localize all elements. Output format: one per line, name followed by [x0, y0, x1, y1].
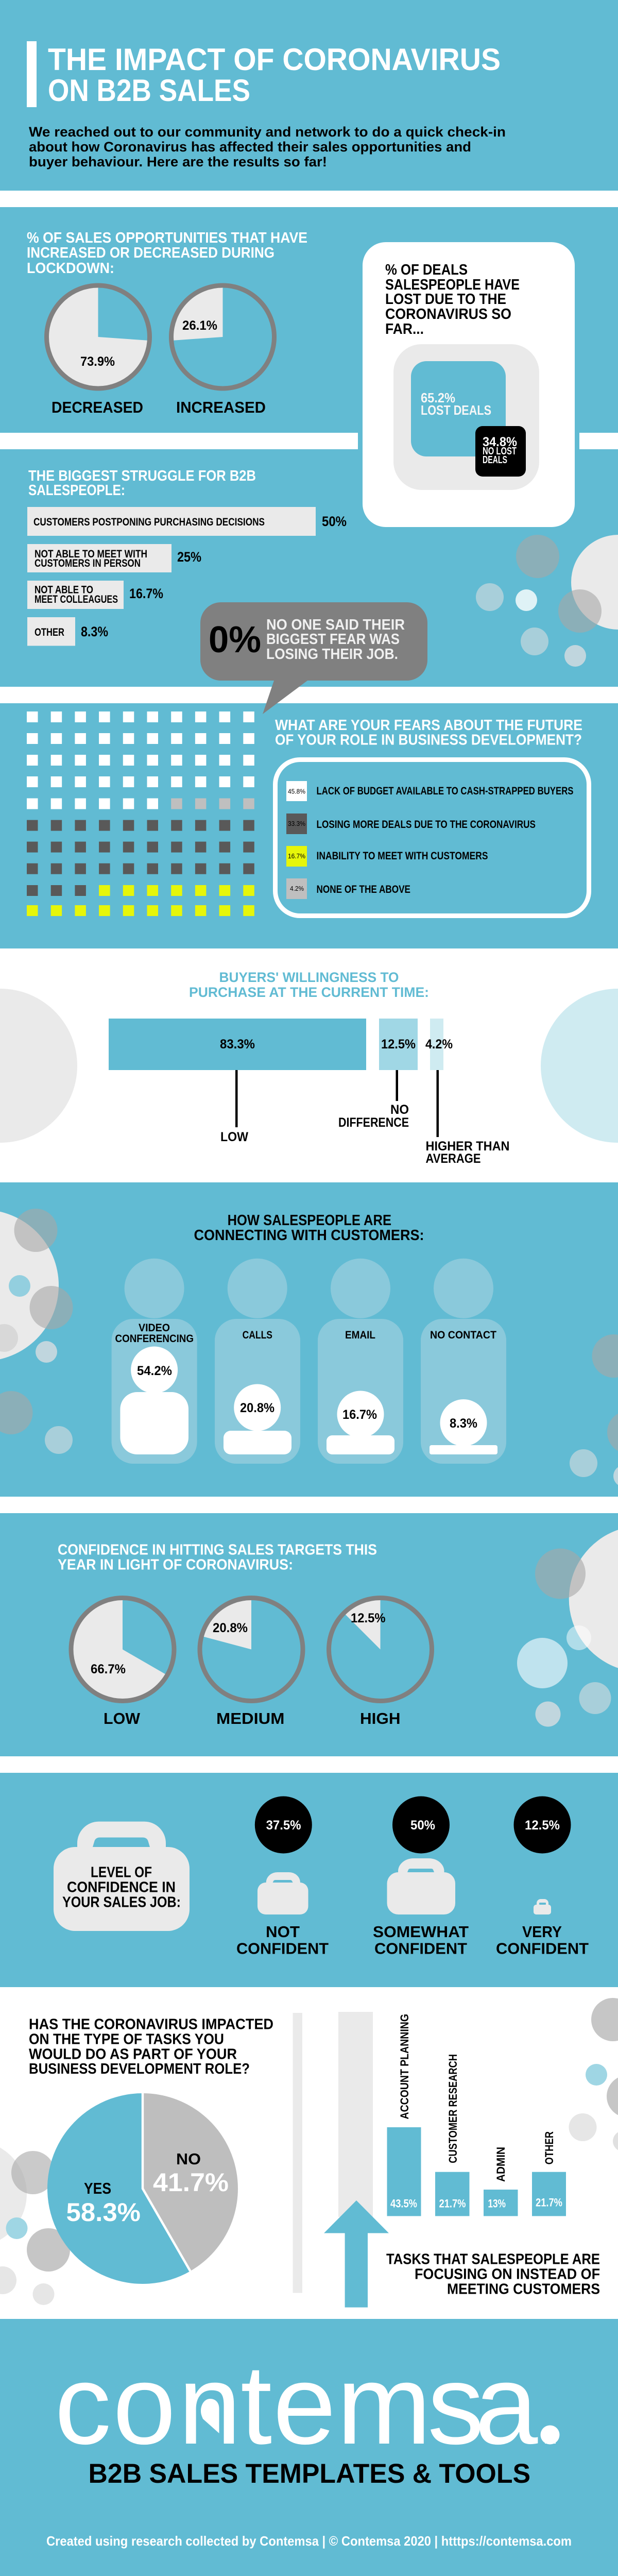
heading: tasks impact question: [29, 2016, 273, 2077]
heading: [28, 468, 256, 499]
decorative circles: struggle section: [476, 535, 618, 667]
bar: no difference: 12.5%: [381, 1037, 416, 1052]
legend item: losing deals: 33.3%: [288, 820, 305, 827]
heading: tasks impact question: WOULD DO AS PART OF YOUR: [29, 2046, 237, 2063]
heading: % OF DEALS: [385, 262, 468, 278]
decorative circles: connecting right: [570, 1334, 618, 1487]
heading: [189, 970, 429, 1000]
bar: postponing: CUSTOMERS POSTPONING PURCHASING DECISIONS: [33, 516, 265, 528]
bar: admin: ADMIN: [494, 2147, 507, 2182]
bar: customer research: 21.7%: [439, 2197, 466, 2210]
bar: low: [109, 1019, 366, 1144]
pie: high confidence: [329, 1598, 432, 1727]
panel: sales opportunities: [27, 230, 307, 416]
legend item: none: [286, 878, 410, 899]
person: video conferencing: VIDEO: [139, 1322, 170, 1334]
decorative circle left: [0, 989, 77, 1143]
intro text: buyer behaviour. Here are the results so far!: [29, 154, 327, 170]
bar: other: 21.7%: [536, 2196, 562, 2209]
bar: colleagues: MEET COLLEAGUES: [35, 594, 118, 605]
legend item: inability to meet: INABILITY TO MEET WITH CUSTOMERS: [316, 850, 488, 862]
bar: colleagues: 16.7%: [129, 586, 163, 601]
heading: confidence in targets: [58, 1541, 377, 1573]
heading: INCREASED OR DECREASED DURING: [27, 245, 274, 261]
stat: somewhat confident: CONFIDENT: [374, 1939, 467, 1958]
bar: low: LOW: [220, 1130, 248, 1144]
heading: % OF SALES OPPORTUNITIES THAT HAVE: [27, 230, 307, 246]
pie: yes or no: YES: [84, 2179, 111, 2197]
label: decreased: DECREASED: [52, 398, 143, 416]
person: video conferencing: 54.2%: [137, 1364, 172, 1378]
divider column: [293, 2013, 302, 2293]
bar: no difference: [338, 1019, 418, 1130]
pie: medium confidence: MEDIUM: [216, 1709, 284, 1727]
decorative circles: tasks right: [569, 1998, 618, 2151]
stat: somewhat confident: 50%: [410, 1818, 435, 1833]
panel: header: [0, 0, 618, 191]
icon: large briefcase with heading: LEVEL OF: [91, 1864, 152, 1880]
bar: customers in person: 25%: [177, 549, 201, 565]
bar: account planning: ACCOUNT PLANNING: [398, 2014, 411, 2120]
panel: buyers' willingness: [0, 970, 618, 1166]
stat: very confident: [496, 1796, 589, 1958]
legend item: inability to meet: 16.7%: [288, 852, 305, 860]
person: email: [318, 1259, 403, 1464]
decorative circles: targets: [517, 1530, 618, 1727]
pie: low confidence: 66.7%: [91, 1662, 126, 1676]
title accent bar: [27, 41, 37, 107]
heading: [27, 230, 307, 277]
pie: high confidence: 12.5%: [351, 1611, 385, 1625]
pie: yes or no: NO: [176, 2150, 201, 2168]
panel: opportunities and struggles background: [0, 207, 618, 687]
heading: fears: [275, 717, 582, 748]
pie: yes or no: 58.3%: [66, 2198, 141, 2227]
label: increased: INCREASED: [176, 398, 266, 416]
heading: LOCKDOWN:: [27, 260, 114, 277]
stat: very confident: VERY: [522, 1923, 562, 1941]
callout: no one feared losing job: NO ONE SAID THEIR: [266, 617, 405, 633]
caption: tasks focus: FOCUSING ON INSTEAD OF: [415, 2266, 600, 2283]
bar: other: OTHER: [35, 626, 64, 638]
heading: how salespeople connect: CONNECTING WITH CUSTOMERS:: [194, 1227, 424, 1244]
intro text: We reached out to our community and network to do a quick check-in: [29, 124, 506, 140]
pie: increased: 26.1%: [182, 318, 217, 333]
panel: fears background: [0, 703, 618, 948]
bar: postponing: [27, 507, 347, 536]
stat: very confident: 12.5%: [525, 1818, 560, 1833]
heading: SALESPEOPLE:: [28, 482, 125, 499]
chart: lost deals nested squares: 34.8%: [483, 435, 517, 449]
caption: tasks focus: [386, 2251, 600, 2297]
title: [48, 42, 501, 108]
heading: fears: OF YOUR ROLE IN BUSINESS DEVELOPMENT?: [275, 732, 582, 748]
person: calls: CALLS: [243, 1329, 272, 1341]
heading: CORONAVIRUS SO: [385, 306, 511, 323]
divider strip left: [0, 433, 358, 449]
icon: large briefcase with heading: [54, 1822, 190, 1931]
bar: account planning: [387, 2014, 421, 2216]
credit line: Created using research collected by Contemsa | © Contemsa 2020 | htttps://contemsa.com: [46, 2533, 572, 2549]
callout: no one feared losing job: BIGGEST FEAR WAS: [266, 631, 400, 648]
intro text: [29, 124, 506, 170]
person: calls: 20.8%: [240, 1401, 274, 1415]
panel: connecting with customers background: [0, 1182, 618, 1497]
bar: customers in person: [27, 544, 201, 572]
callout: no one feared losing job: 0%: [209, 619, 261, 660]
decorative circles: tasks left: [0, 2141, 70, 2305]
stat: somewhat confident: SOMEWHAT: [373, 1923, 469, 1941]
caption: tasks focus: MEETING CUSTOMERS: [447, 2281, 600, 2297]
person: no contact: NO CONTACT: [430, 1329, 496, 1341]
pie: decreased: 73.9%: [80, 354, 115, 369]
panel: footer: [0, 2319, 618, 2576]
bar: other: OTHER: [543, 2131, 556, 2164]
heading: SALESPEOPLE HAVE: [385, 277, 520, 293]
heading: tasks impact question: HAS THE CORONAVIRUS IMPACTED: [29, 2016, 273, 2033]
pie: medium confidence: [200, 1598, 303, 1727]
bar: no difference: DIFFERENCE: [338, 1115, 409, 1130]
chart: fears waffle grid: [27, 711, 254, 916]
intro text: about how Coronavirus has affected their sales opportunities and: [29, 139, 471, 155]
icon: logo dot: [541, 2426, 559, 2444]
pie: decreased: [46, 285, 149, 388]
bar: account planning: 43.5%: [390, 2197, 417, 2210]
chart: lost deals nested squares: 65.2%: [421, 390, 455, 405]
chart: lost deals nested squares: [393, 344, 539, 490]
bar: other: [27, 617, 108, 646]
stat: not confident: [236, 1796, 329, 1958]
panel: lost deals: [363, 242, 575, 527]
heading: tasks impact question: BUSINESS DEVELOPMENT ROLE?: [29, 2061, 250, 2077]
pie: yes or no: [47, 2093, 238, 2284]
heading: fears: WHAT ARE YOUR FEARS ABOUT THE FUTURE: [275, 717, 582, 734]
callout: no one feared losing job: [200, 602, 427, 714]
divider strip right: [579, 433, 618, 449]
title: ON B2B SALES: [48, 73, 250, 108]
bar: postponing: 50%: [322, 514, 347, 529]
bar: other: 8.3%: [81, 624, 108, 639]
bar: higher than average: 4.2%: [425, 1037, 453, 1052]
arrow: up: [324, 2200, 389, 2308]
legend item: lack of budget: 45.8%: [288, 787, 305, 795]
pie: low confidence: [71, 1598, 174, 1727]
chart: lost deals nested squares: LOST DEALS: [421, 402, 491, 418]
person: email: EMAIL: [345, 1329, 375, 1341]
bar: other: [532, 2131, 566, 2216]
heading: PURCHASE AT THE CURRENT TIME:: [189, 985, 429, 1000]
heading: confidence in targets: CONFIDENCE IN HITTING SALES TARGETS THIS: [58, 1541, 377, 1558]
heading: LOST DUE TO THE: [385, 291, 506, 308]
stat: somewhat confident: [373, 1796, 469, 1958]
bar chart: tasks: [387, 2014, 566, 2216]
bar: admin: 13%: [488, 2197, 506, 2210]
legend item: losing deals: [286, 814, 536, 834]
person: email: 16.7%: [342, 1408, 377, 1422]
icon: large briefcase with heading: CONFIDENCE IN: [67, 1879, 176, 1896]
bar: higher than average: [425, 1019, 510, 1166]
person: video conferencing: [112, 1259, 197, 1464]
pie: low confidence: LOW: [104, 1709, 141, 1727]
stat: not confident: NOT: [266, 1923, 300, 1941]
bar: customer research: CUSTOMER RESEARCH: [447, 2054, 459, 2163]
bar: customer research: [435, 2054, 470, 2216]
icon: large briefcase with heading: YOUR SALES JOB:: [62, 1894, 181, 1911]
person: calls: [215, 1259, 300, 1464]
chart: lost deals nested squares: NO LOST: [483, 446, 517, 457]
heading: FAR...: [385, 321, 424, 337]
pie: medium confidence: 20.8%: [213, 1621, 248, 1635]
panel: confidence in targets background: [0, 1513, 618, 1756]
heading: THE BIGGEST STRUGGLE FOR B2B: [28, 468, 256, 484]
legend item: none: NONE OF THE ABOVE: [316, 884, 410, 895]
legend item: lack of budget: [286, 781, 574, 801]
heading: tasks impact question: ON THE TYPE OF TASKS YOU: [29, 2031, 224, 2047]
heading: BUYERS' WILLINGNESS TO: [219, 970, 399, 985]
bar: higher than average: HIGHER THAN: [425, 1139, 510, 1154]
bar: customers in person: NOT ABLE TO MEET WITH: [35, 548, 147, 560]
legend item: losing deals: LOSING MORE DEALS DUE TO THE CORONAVIRUS: [316, 819, 536, 831]
panel: biggest struggle: [27, 468, 347, 646]
decorative circles: connecting left: [0, 1209, 73, 1454]
panel: job confidence background: [0, 1773, 618, 1987]
heading: how salespeople connect: [194, 1212, 424, 1244]
stat: very confident: CONFIDENT: [496, 1939, 589, 1958]
legend item: inability to meet: [286, 846, 488, 867]
callout: no one feared losing job: LOSING THEIR JOB.: [266, 646, 398, 663]
bar: admin: [484, 2147, 518, 2216]
stat: not confident: CONFIDENT: [236, 1939, 329, 1958]
pie: yes or no: 41.7%: [153, 2168, 229, 2197]
person: no contact: [421, 1259, 506, 1464]
logo wordmark: contemsa.: [55, 2341, 566, 2468]
legend item: none: 4.2%: [290, 885, 304, 892]
person: video conferencing: CONFERENCING: [115, 1333, 194, 1345]
heading: confidence in targets: YEAR IN LIGHT OF CORONAVIRUS:: [58, 1557, 293, 1573]
decorative circle right: [541, 989, 618, 1143]
stat: not confident: 37.5%: [266, 1818, 301, 1833]
pie: increased: [171, 285, 274, 388]
pie: high confidence: HIGH: [360, 1709, 401, 1727]
heading: [385, 262, 520, 337]
bar: customers in person: CUSTOMERS IN PERSON: [35, 557, 141, 569]
tagline: B2B SALES TEMPLATES & TOOLS: [89, 2459, 530, 2489]
bar: low: 83.3%: [220, 1037, 255, 1052]
bar: higher than average: AVERAGE: [425, 1151, 481, 1166]
heading: how salespeople connect: HOW SALESPEOPLE ARE: [228, 1212, 391, 1229]
bar: colleagues: [27, 581, 163, 609]
icon: logo pin: [201, 2399, 219, 2433]
person: no contact: 8.3%: [450, 1416, 477, 1431]
title: THE IMPACT OF CORONAVIRUS: [48, 42, 501, 77]
chart: lost deals nested squares: DEALS: [483, 454, 507, 466]
bar: no difference: NO: [390, 1103, 409, 1117]
bar: colleagues: NOT ABLE TO: [35, 584, 93, 596]
legend: fears: [275, 759, 589, 916]
background column behind arrow: [338, 2012, 373, 2217]
